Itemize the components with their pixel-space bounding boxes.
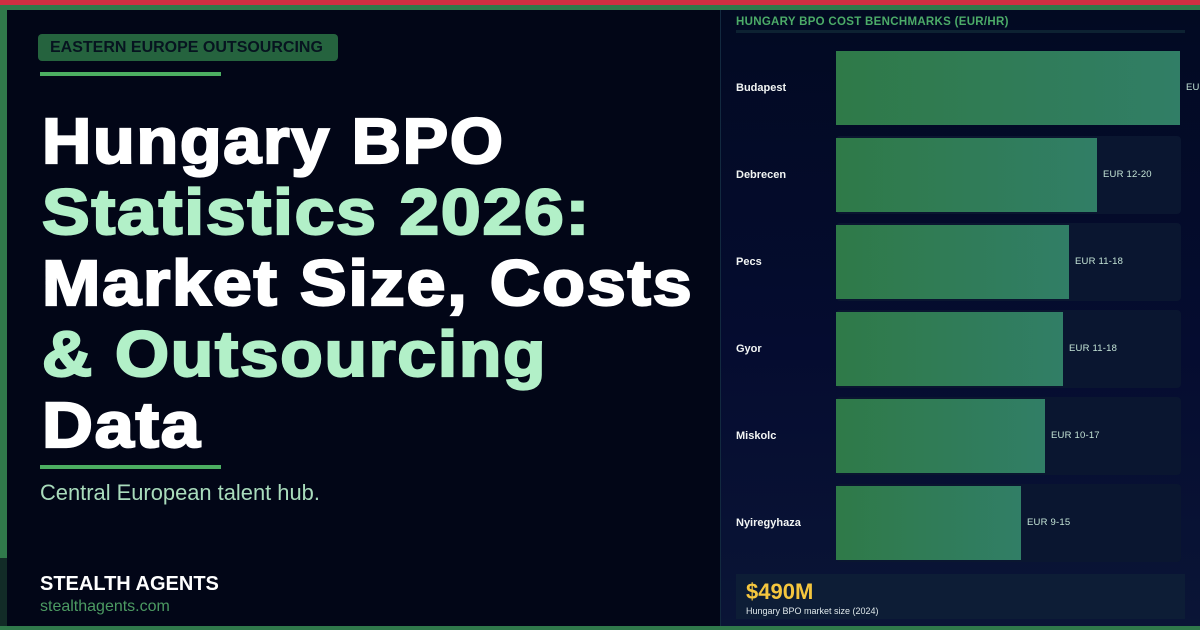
row: Pecs (736, 223, 1181, 301)
stat value: $490M (746, 579, 813, 604)
label Miskolc: Miskolc (736, 430, 776, 442)
row: Nyiregyhaza (736, 486, 1070, 560)
value Debrecen: EUR 12-20 (1103, 169, 1152, 180)
category badge (38, 34, 338, 61)
accent rule bottom (40, 465, 221, 469)
title line 4: & Outsourcing (42, 318, 547, 390)
bar Budapest (836, 51, 1180, 125)
label Budapest: Budapest (736, 82, 786, 94)
brand name: STEALTH AGENTS (40, 573, 219, 595)
brand url: stealthagents.com (40, 598, 170, 615)
row: Miskolc (736, 397, 1181, 473)
bar Miskolc (836, 399, 1045, 473)
category badge: EASTERN EUROPE OUTSOURCING (50, 39, 323, 56)
track Debrecen (836, 136, 1181, 214)
panel: right chart background (720, 10, 1200, 630)
top green stripe (0, 5, 1200, 10)
left dark green stripe (0, 558, 7, 626)
value Miskolc: EUR 10-17 (1051, 430, 1100, 441)
bar chart: cost benchmarks (736, 51, 1200, 560)
row: Debrecen (736, 136, 1181, 214)
title line 3: Market Size, Costs (42, 247, 693, 319)
bar Pecs (836, 225, 1069, 299)
title line 1: Hungary BPO (42, 105, 505, 177)
row: Gyor (736, 310, 1181, 388)
label Pecs: Pecs (736, 256, 762, 268)
bar Gyor (836, 312, 1063, 386)
label Debrecen: Debrecen (736, 169, 786, 181)
bottom green stripe (0, 626, 1200, 630)
subtitle: Central European talent hub. (40, 480, 320, 505)
stat card: market size (736, 574, 1185, 619)
chart heading underline (736, 30, 1185, 33)
bar Nyiregyhaza (836, 486, 1021, 560)
accent rule top (40, 72, 221, 76)
title line 5: Data (42, 389, 202, 461)
title (42, 105, 693, 461)
bar Debrecen (836, 138, 1097, 212)
value Pecs: EUR 11-18 (1075, 256, 1123, 267)
left green stripe (0, 10, 7, 558)
value Nyiregyhaza: EUR 9-15 (1027, 517, 1070, 528)
row: Budapest (736, 51, 1200, 125)
value Gyor: EUR 11-18 (1069, 343, 1117, 354)
top red stripe (0, 0, 1200, 5)
panel: left background (0, 0, 720, 630)
track Gyor (836, 310, 1181, 388)
track Pecs (836, 223, 1181, 301)
stat caption: Hungary BPO market size (2024) (746, 606, 879, 616)
label Gyor: Gyor (736, 343, 762, 355)
title line 2: Statistics 2026: (42, 176, 591, 248)
track Miskolc (836, 397, 1181, 475)
chart heading: HUNGARY BPO COST BENCHMARKS (EUR/HR) (736, 16, 1009, 28)
track Nyiregyhaza (836, 484, 1181, 562)
label Nyiregyhaza: Nyiregyhaza (736, 517, 801, 529)
